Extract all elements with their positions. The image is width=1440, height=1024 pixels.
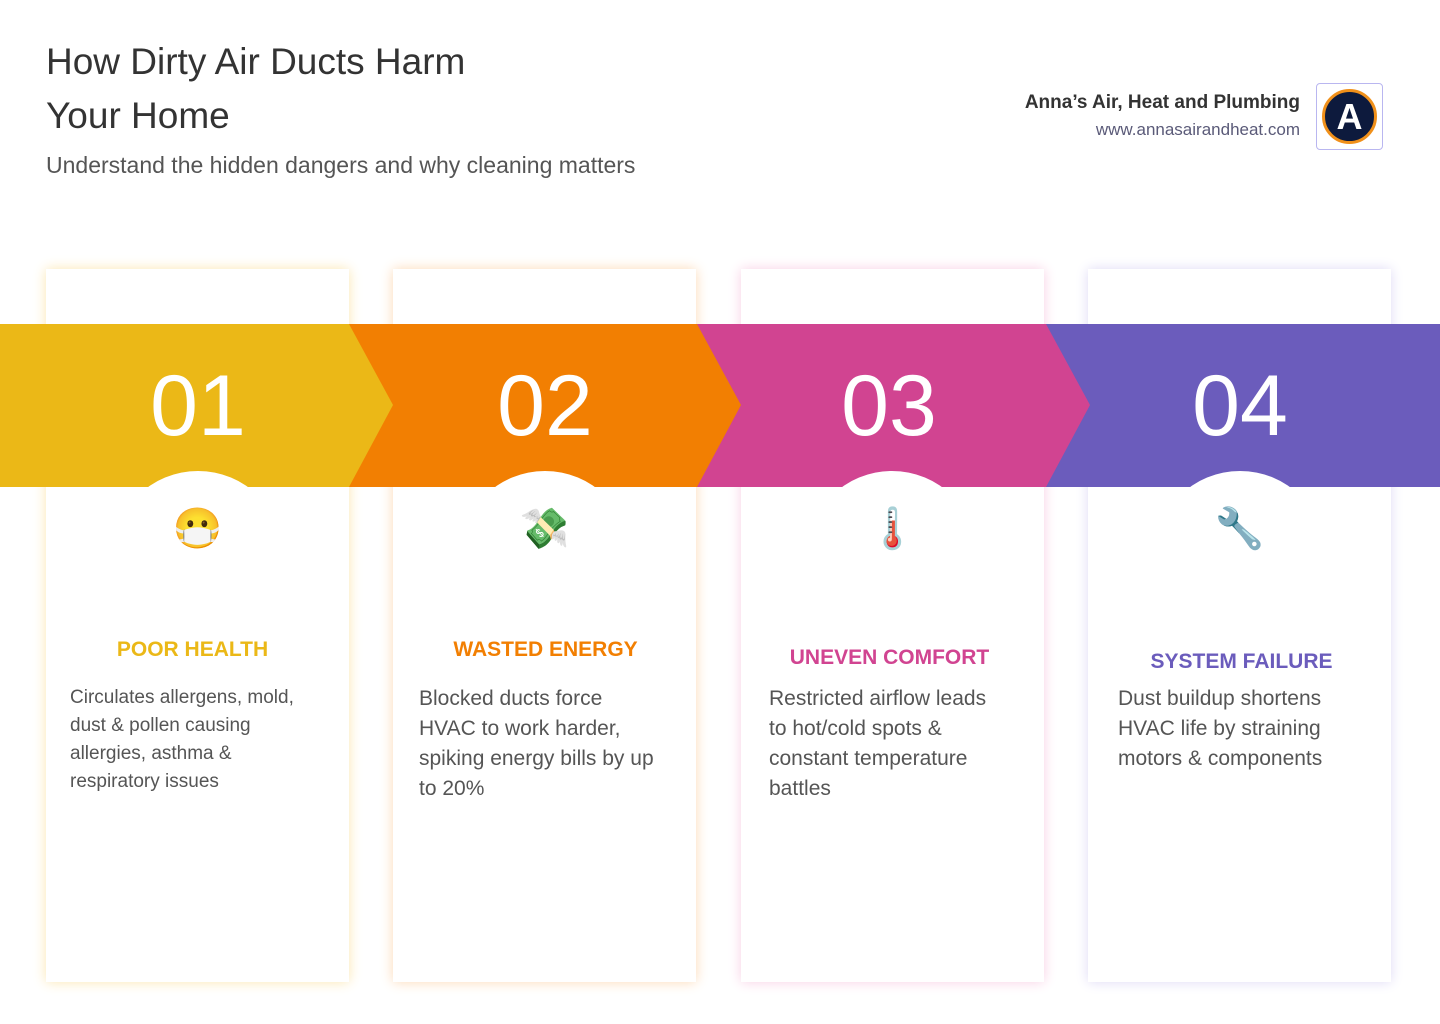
brand text bbox=[1025, 92, 1300, 139]
icon: mask face: 😷 bbox=[173, 505, 222, 552]
title: Your Home bbox=[46, 95, 230, 136]
text 3: constant temperature bbox=[769, 747, 967, 770]
heading 4: SYSTEM FAILURE bbox=[1150, 650, 1333, 673]
text 1 bbox=[70, 687, 294, 792]
text 2: to 20% bbox=[419, 777, 484, 800]
title: How Dirty Air Ducts Harm bbox=[46, 41, 465, 82]
brand text: Anna’s Air, Heat and Plumbing bbox=[1025, 92, 1300, 113]
text 2 bbox=[419, 687, 654, 800]
heading 2: WASTED ENERGY bbox=[453, 638, 638, 661]
text 4: HVAC life by straining bbox=[1118, 717, 1321, 740]
icon: wrench: 🔧 bbox=[1215, 505, 1264, 552]
text 4: motors & components bbox=[1118, 747, 1322, 770]
card 4 bbox=[1088, 269, 1391, 982]
logo bbox=[1316, 83, 1383, 150]
heading 3: UNEVEN COMFORT bbox=[790, 646, 989, 669]
arrow band: 03 bbox=[841, 358, 937, 454]
text 2: HVAC to work harder, bbox=[419, 717, 621, 740]
card 3 bbox=[741, 269, 1044, 982]
logo: A bbox=[1336, 96, 1362, 137]
arrow band: 01 bbox=[150, 358, 246, 454]
text 1: dust & pollen causing bbox=[70, 715, 251, 736]
text 1: allergies, asthma & bbox=[70, 743, 232, 764]
brand text: www.annasairandheat.com bbox=[1096, 120, 1300, 139]
arrow band: 04 bbox=[1192, 358, 1288, 454]
heading 1: POOR HEALTH bbox=[117, 638, 268, 661]
icon: thermometer: 🌡️ bbox=[868, 505, 917, 552]
text 1: Circulates allergens, mold, bbox=[70, 687, 294, 708]
text 3: Restricted airflow leads bbox=[769, 687, 986, 710]
card 1 bbox=[46, 269, 349, 982]
title bbox=[46, 41, 465, 136]
arrow band: 02 bbox=[497, 358, 593, 454]
text 3: battles bbox=[769, 777, 831, 800]
text 3: to hot/cold spots & bbox=[769, 717, 942, 740]
icon: money wings: 💸 bbox=[520, 505, 569, 552]
text 2: Blocked ducts force bbox=[419, 687, 602, 710]
subtitle: Understand the hidden dangers and why cleaning matters bbox=[46, 152, 635, 178]
text 1: respiratory issues bbox=[70, 771, 219, 792]
text 4 bbox=[1118, 687, 1322, 770]
text 2: spiking energy bills by up bbox=[419, 747, 654, 770]
text 3 bbox=[769, 687, 986, 800]
card 2 bbox=[393, 269, 696, 982]
text 4: Dust buildup shortens bbox=[1118, 687, 1321, 710]
